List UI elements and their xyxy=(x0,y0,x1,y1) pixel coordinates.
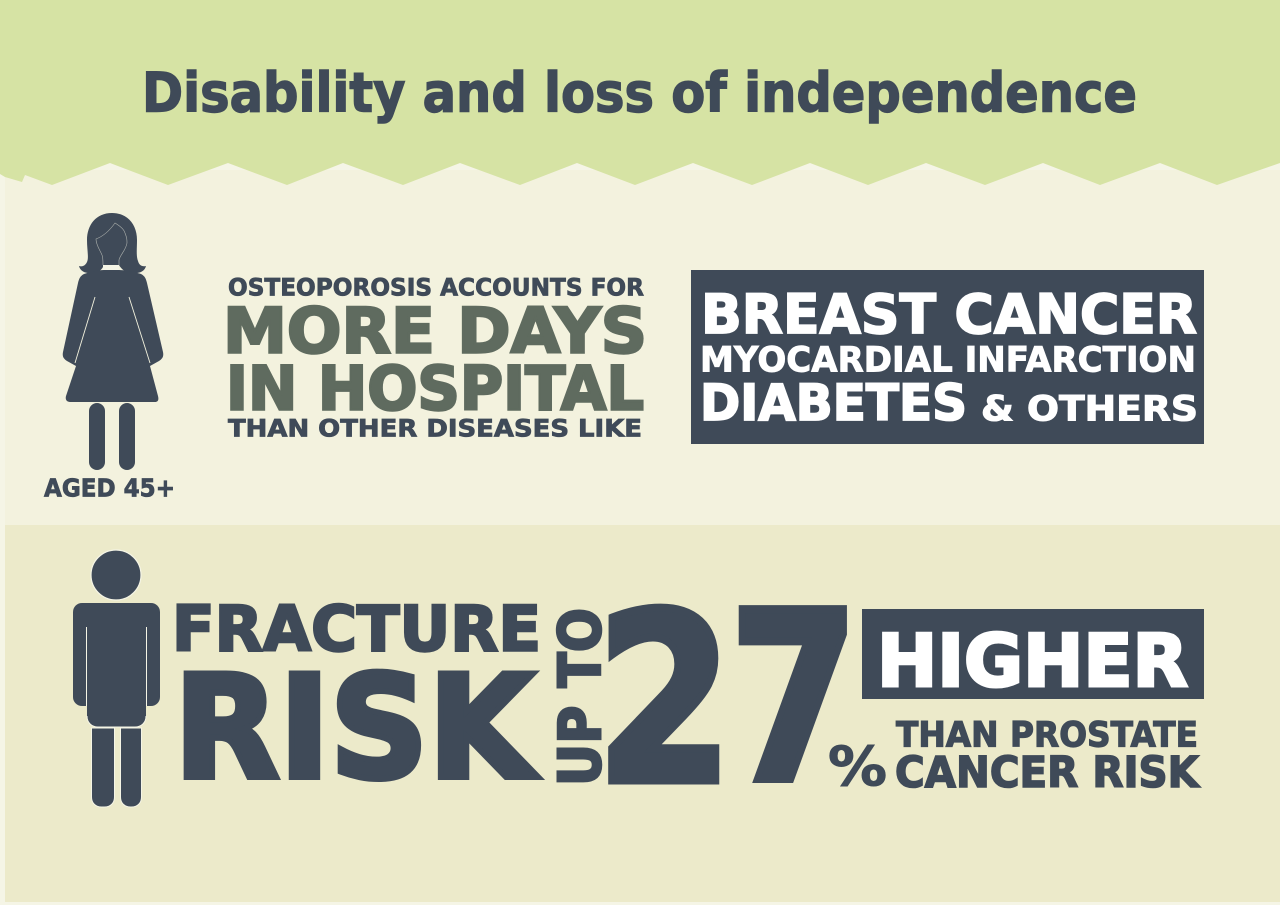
panel: other diseases box: BREAST CANCER xyxy=(701,283,1197,346)
text block: fracture risk: FRACTURE xyxy=(172,592,541,666)
text block: hospital days: MORE DAYS xyxy=(223,294,647,368)
text block: hospital days xyxy=(223,274,647,442)
text block: than prostate cancer risk: THAN PROSTATE xyxy=(896,716,1198,756)
panel: other diseases box xyxy=(691,270,1204,444)
big number 27: 2 xyxy=(596,564,733,836)
percent sign: % xyxy=(828,735,887,798)
panel: upper cream section xyxy=(5,170,1280,525)
header band with zigzag edge xyxy=(0,0,1280,185)
label: aged 45+: AGED 45+ xyxy=(44,474,175,502)
text block: hospital days: OSTEOPOROSIS ACCOUNTS FOR xyxy=(228,274,644,302)
text block: hospital days: IN HOSPITAL xyxy=(226,354,644,424)
callout: higher: HIGHER xyxy=(877,619,1188,703)
text block: than prostate cancer risk xyxy=(895,716,1201,798)
icon: person figure xyxy=(73,550,160,807)
title: Disability and loss of independence xyxy=(142,62,1137,124)
panel: other diseases box: DIABETES xyxy=(700,374,967,432)
text block: fracture risk: RISK xyxy=(174,646,539,811)
text block: than prostate cancer risk: CANCER RISK xyxy=(895,748,1201,798)
panel: other diseases box: & OTHERS xyxy=(981,390,1198,430)
rotated text: up to: UP TO xyxy=(546,608,614,786)
panel: lower fracture risk section xyxy=(5,525,1280,902)
big number 27 xyxy=(596,563,858,836)
panel: other diseases box: MYOCARDIAL INFARCTION xyxy=(700,340,1196,380)
icon: woman figure xyxy=(63,213,163,470)
text block: hospital days: THAN OTHER DISEASES LIKE xyxy=(228,414,642,442)
big number 27: 7 xyxy=(730,563,858,834)
